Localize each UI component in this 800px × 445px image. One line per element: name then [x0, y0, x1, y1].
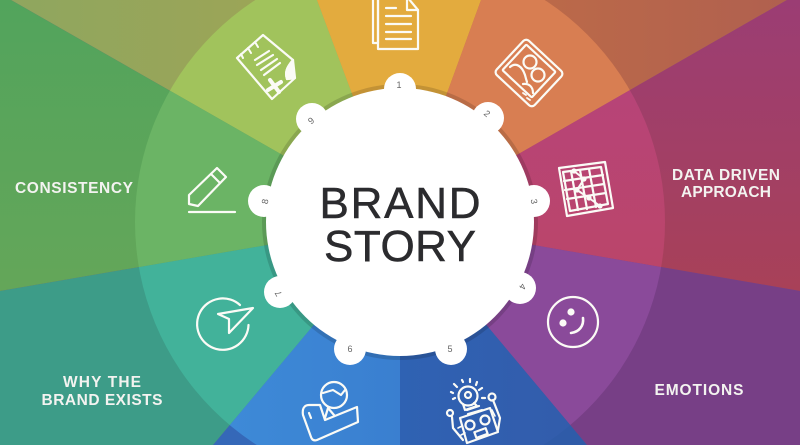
- tab numbers: 3: [529, 198, 539, 205]
- label: data driven approach: DATA DRIVEN: [672, 167, 780, 184]
- icon: robot with light bulb: [447, 379, 500, 443]
- icon: tablet with people: [494, 38, 564, 108]
- tab numbers: 5: [447, 344, 453, 354]
- tab numbers: 6: [347, 344, 353, 354]
- label: data driven approach: [672, 167, 780, 201]
- tab numbers: 1: [396, 80, 402, 90]
- tab numbers: 8: [260, 198, 270, 205]
- label: why the brand exists: [42, 374, 162, 409]
- shadow ring around hub: [262, 84, 538, 360]
- icon: compass arrow: [197, 298, 253, 350]
- label: consistency: CONSISTENCY: [15, 180, 134, 197]
- title: STORY: [324, 222, 476, 271]
- tab numbers: 7: [273, 289, 284, 298]
- central hub with numbered tabs: [248, 73, 550, 365]
- label: why the brand exists: WHY THE: [63, 374, 141, 391]
- tab numbers: [260, 80, 539, 354]
- icon: notepad: [237, 35, 295, 99]
- icon: document: [373, 0, 418, 49]
- label: data driven approach: APPROACH: [681, 184, 771, 201]
- label: emotions: EMOTIONS: [654, 382, 744, 399]
- title: [320, 179, 480, 271]
- icon: map grid: [559, 162, 613, 216]
- tab numbers: 4: [517, 282, 528, 291]
- title: BRAND: [320, 179, 480, 228]
- tab numbers: 9: [306, 115, 316, 126]
- inner colour wheel: [135, 0, 665, 445]
- icon: person at desk: [303, 382, 358, 440]
- icon: smiley: [548, 297, 598, 347]
- tab numbers: 2: [482, 108, 492, 119]
- label: why the brand exists: BRAND EXISTS: [42, 392, 162, 409]
- icon: pencil: [189, 168, 235, 212]
